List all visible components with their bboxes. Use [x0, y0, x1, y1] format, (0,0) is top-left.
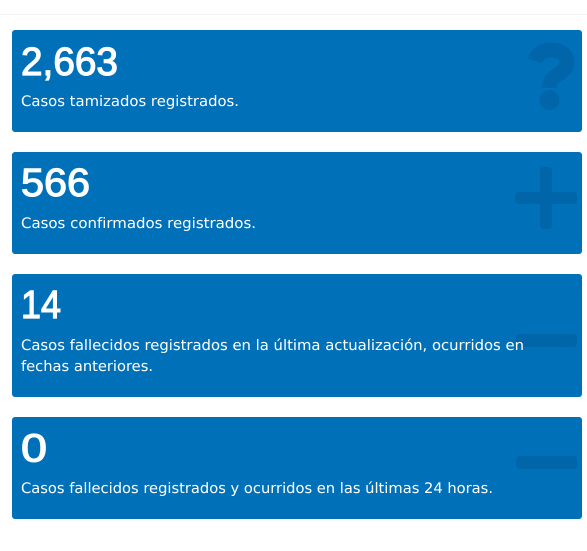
- number: 566: 566: [21, 161, 90, 205]
- text: fallecidos en fechas anteriores: Casos fallecidos registrados en la última actualización, ocurridos en: [21, 338, 524, 354]
- number: 0: 0: [21, 426, 47, 470]
- icon: minus: [516, 334, 577, 347]
- panel: fallecidos en fechas anteriores: [12, 274, 582, 397]
- text: fallecidos en fechas anteriores: fechas anteriores.: [21, 359, 153, 375]
- text: casos confirmados: Casos confirmados registrados.: [21, 216, 256, 232]
- number: 2,663: 2,663: [21, 40, 118, 84]
- icon: minus: [516, 456, 577, 469]
- text: fallecidos en fechas anteriores: [21, 338, 524, 375]
- panel: fallecidos en 24 horas: [12, 417, 582, 519]
- text: casos tamizados: Casos tamizados registrados.: [21, 94, 239, 110]
- number: 14: 14: [21, 283, 61, 327]
- icon: plus: [515, 167, 577, 229]
- text: fallecidos en 24 horas: Casos fallecidos registrados y ocurridos en las últimas 24 horas.: [21, 481, 493, 497]
- icon: question mark: [535, 50, 567, 110]
- panel: casos confirmados: [12, 152, 582, 254]
- panel: casos tamizados: [12, 30, 582, 132]
